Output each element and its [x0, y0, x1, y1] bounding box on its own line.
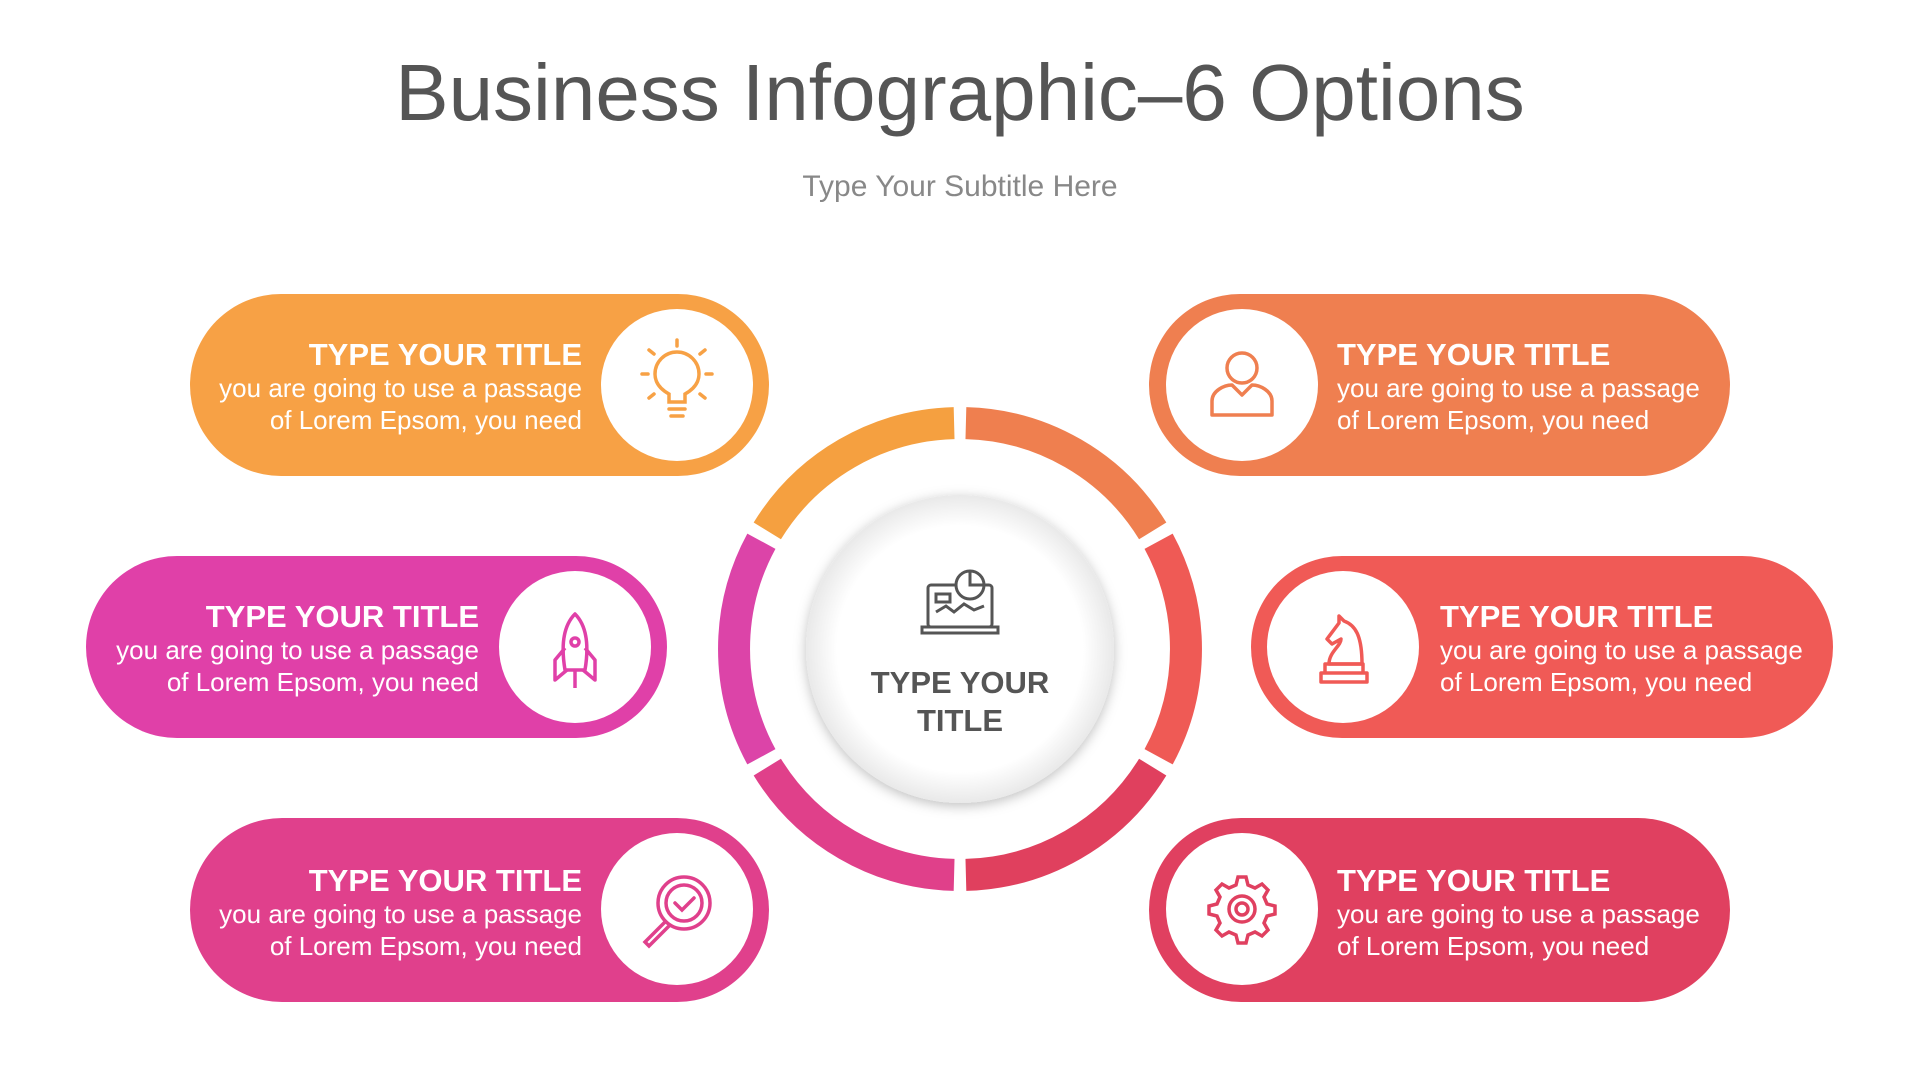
- panel: bottom-left: TYPE YOUR TITLE: [309, 863, 582, 898]
- icon: bulb: [642, 340, 712, 416]
- panel: top-left: TYPE YOUR TITLE: [309, 337, 582, 372]
- center circle: [806, 495, 1114, 803]
- panel: mid-right: you are going to use a passage: [1440, 635, 1803, 665]
- panel: mid-right: [1251, 556, 1833, 738]
- panel: bottom-right: TYPE YOUR TITLE: [1337, 863, 1610, 898]
- panel: bottom-left: of Lorem Epsom, you need: [270, 931, 582, 961]
- panel: top-left: [190, 294, 769, 476]
- panel: bottom-left: you are going to use a passage: [219, 899, 582, 929]
- panel: bottom-right: you are going to use a passage: [1337, 899, 1700, 929]
- center circle: TITLE: [917, 703, 1003, 738]
- panel: top-left: you are going to use a passage: [219, 373, 582, 403]
- panel: top-left: of Lorem Epsom, you need: [270, 405, 582, 435]
- panel: top-right: you are going to use a passage: [1337, 373, 1700, 403]
- icon: chess knight: [1321, 616, 1367, 682]
- subtitle: Type Your Subtitle Here: [802, 170, 1118, 203]
- center text: TYPE YOUR: [871, 665, 1049, 700]
- panel: mid-left: [86, 556, 667, 738]
- panel: top-right: [1149, 294, 1730, 476]
- panel: bottom-right: of Lorem Epsom, you need: [1337, 931, 1649, 961]
- panel: bottom-right: [1149, 818, 1730, 1002]
- panel: top-right: TYPE YOUR TITLE: [1337, 337, 1610, 372]
- title: Business Infographic–6 Options: [395, 48, 1525, 137]
- panel: top-right: of Lorem Epsom, you need: [1337, 405, 1649, 435]
- panel: mid-right: TYPE YOUR TITLE: [1440, 599, 1713, 634]
- panel: bottom-left: [190, 818, 769, 1002]
- panel: mid-right: of Lorem Epsom, you need: [1440, 667, 1752, 697]
- icon: person: [1212, 353, 1272, 415]
- icon: magnifier check: [645, 877, 710, 946]
- icon: gear: [1209, 877, 1275, 943]
- icon: rocket: [555, 614, 595, 688]
- panel: mid-left: you are going to use a passage: [116, 635, 479, 665]
- panel: mid-left: TYPE YOUR TITLE: [206, 599, 479, 634]
- icon: laptop chart: [922, 571, 998, 633]
- center ring: [734, 423, 1186, 875]
- panel: mid-left: of Lorem Epsom, you need: [167, 667, 479, 697]
